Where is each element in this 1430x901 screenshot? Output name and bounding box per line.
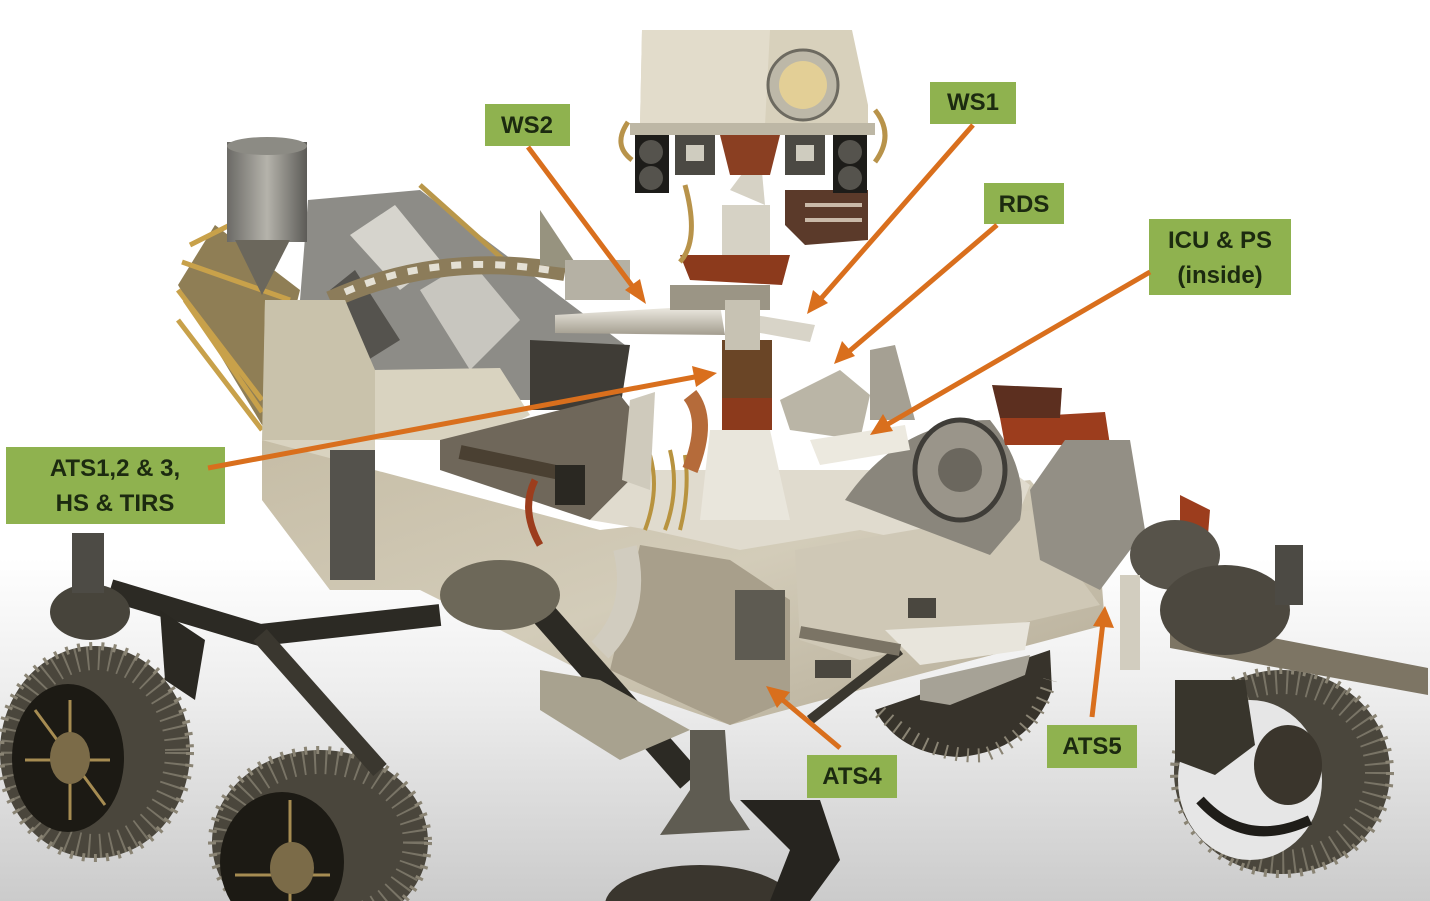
red shroud — [992, 385, 1210, 535]
arrow: RDS — [834, 225, 997, 364]
radiator panels left — [178, 225, 300, 430]
label: ATS1,2 and 3, HS and TIRS: ATS1,2 & 3, — [50, 455, 180, 482]
arrow: ATS1,2 and 3, HS and TIRS — [208, 366, 717, 468]
storage cylinder — [227, 137, 307, 295]
mast base — [622, 340, 790, 520]
mast — [680, 150, 868, 285]
label: RDS: RDS — [999, 191, 1049, 218]
arrow: WS2 — [528, 147, 646, 304]
main chassis — [262, 440, 1105, 725]
lower bay — [540, 670, 690, 760]
suspension — [50, 533, 690, 780]
label: ATS5: ATS5 — [1062, 733, 1122, 760]
wheel: right — [1174, 670, 1390, 874]
label: ATS1,2 and 3, HS and TIRS — [6, 447, 225, 524]
label: ICU and PS (inside) — [1149, 219, 1291, 295]
label: RDS — [984, 183, 1064, 224]
rear body block — [262, 300, 530, 590]
front plate — [885, 622, 1030, 665]
label: ATS4: ATS4 — [822, 763, 882, 790]
arm right — [1170, 618, 1428, 695]
arrow: ATS4 — [766, 686, 840, 748]
wheel: rear left — [0, 646, 190, 858]
deck equipment — [460, 210, 915, 505]
label: ATS1,2 and 3, HS and TIRS: HS & TIRS — [56, 490, 174, 517]
label: ICU and PS (inside): ICU & PS — [1168, 227, 1272, 254]
arrow: ICU and PS — [870, 272, 1150, 435]
upper deck — [440, 395, 640, 520]
label: WS1: WS1 — [947, 89, 999, 116]
label: ATS4 — [807, 755, 897, 798]
dish — [845, 420, 1022, 555]
label: ICU and PS (inside): (inside) — [1177, 262, 1263, 289]
wheel: far front — [875, 650, 1052, 757]
robotic arm turret — [555, 285, 815, 350]
arrow: ATS5 — [1092, 606, 1114, 717]
wheel: middle left — [212, 750, 428, 901]
RTG angled panels — [300, 185, 630, 410]
truss arch — [330, 264, 565, 300]
camera head — [621, 30, 885, 193]
front leg — [660, 730, 840, 901]
wheel: front left — [605, 865, 795, 901]
label: ATS5 — [1047, 725, 1137, 768]
label: WS2: WS2 — [501, 112, 553, 139]
label: WS2 — [485, 104, 570, 146]
right strut — [1030, 440, 1145, 590]
arrow: WS1 — [807, 125, 973, 314]
label: WS1 — [930, 82, 1016, 124]
